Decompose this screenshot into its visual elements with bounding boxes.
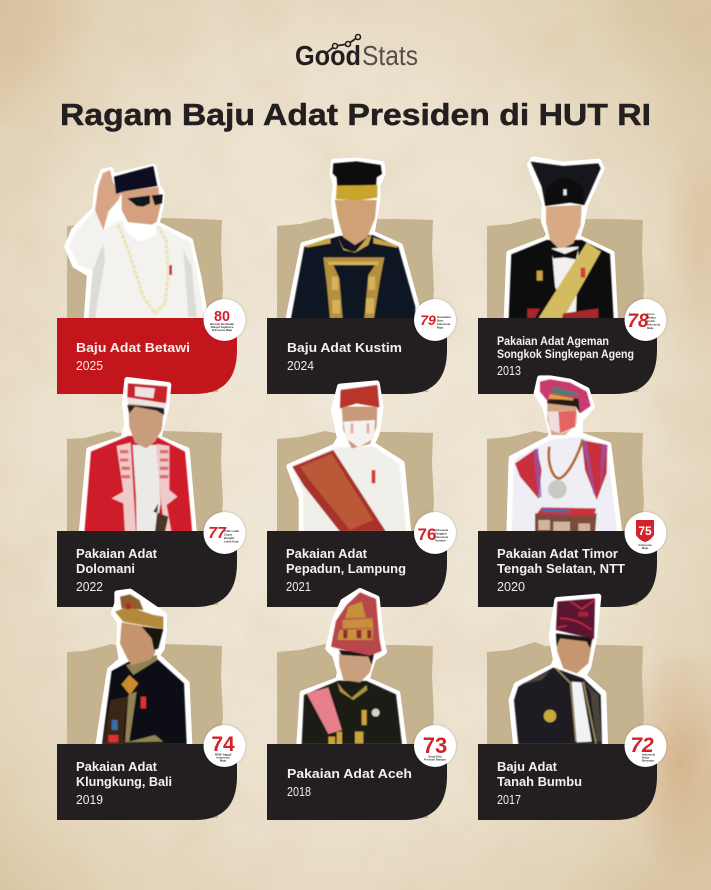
figure: Jokowi in Aceh dress	[299, 591, 404, 745]
badge: HUT 77: Lebih Kuat	[224, 540, 239, 544]
label text	[497, 759, 582, 789]
label text: Baju Adat Kustim	[287, 340, 402, 355]
card: Pakaian Adat Klungkung, Bali 2019	[57, 592, 246, 820]
badge: HUT 73: Prestasi Bangsa	[424, 758, 446, 762]
year: 2022	[76, 580, 103, 594]
badge: HUT 75: 75	[638, 524, 652, 538]
figure: Jokowi in Kustim dress	[288, 161, 417, 320]
figure: Jokowi in Klungkung dress	[98, 592, 189, 745]
figure: Jokowi in Dolomani dress	[82, 380, 194, 533]
badge: HUT 76: Indonesia	[435, 535, 448, 539]
label panel	[267, 318, 447, 394]
badge: HUT 74: SDM Unggul	[215, 752, 232, 756]
label text	[76, 546, 158, 576]
badge: HUT 80: 80	[214, 308, 230, 325]
figure: Jokowi in Tanah Bumbu dress	[512, 597, 605, 745]
badge: HUT 80: Indonesia Maju	[212, 328, 232, 332]
badge: HUT 78: Untuk	[647, 319, 655, 323]
label text: Tengah Selatan, NTT	[497, 561, 625, 576]
badge: HUT 78: 78	[627, 311, 649, 332]
label panel	[57, 531, 237, 607]
badge: HUT 79: Nusantara	[437, 315, 451, 319]
logo: GoodStats	[295, 34, 418, 71]
year: 2019	[76, 793, 103, 807]
badge: HUT 79: Maju	[437, 326, 444, 330]
year: 2025	[76, 359, 103, 373]
title: Ragam Baju Adat Presiden di HUT RI	[60, 97, 651, 132]
badge: HUT 73	[414, 725, 456, 767]
year: 2020	[497, 580, 525, 594]
label text: Pakaian Adat Timor	[497, 546, 618, 561]
badge: HUT 72: Kerja	[642, 756, 649, 760]
figure: Jokowi in Pepadun dress	[289, 383, 408, 533]
badge: HUT 79	[414, 299, 456, 341]
badge: HUT 76	[414, 512, 456, 554]
label text	[497, 334, 634, 361]
badge: HUT 77: 77	[208, 525, 227, 542]
badge: HUT 78	[624, 299, 666, 341]
badge: HUT 75	[624, 512, 666, 554]
label panel	[478, 531, 657, 607]
label text: Klungkung, Bali	[76, 774, 172, 789]
badge: HUT 79: 79	[420, 312, 436, 328]
card: Baju Adat Betawi 2025	[57, 166, 246, 394]
label text	[286, 546, 406, 576]
label text: Baju Adat	[497, 759, 558, 774]
label panel	[267, 531, 447, 607]
logo: GoodStats: Stats	[362, 40, 418, 71]
badge: HUT 79: Indonesia	[437, 322, 450, 326]
card: Pakaian Adat Aceh 2018	[267, 591, 456, 820]
label panel	[478, 318, 657, 394]
label text: Pakaian Adat Aceh	[287, 766, 412, 781]
badge: HUT 74: Maju	[220, 758, 226, 762]
badge: HUT 72	[624, 725, 666, 767]
logo: GoodStats: Good	[295, 40, 361, 71]
badge: HUT 78: Indonesia	[647, 322, 660, 326]
label panel	[57, 744, 237, 820]
label panel	[57, 318, 237, 394]
label text	[76, 759, 172, 789]
label text: Pakaian Adat	[286, 546, 368, 561]
badge: HUT 75: Indonesia	[638, 543, 652, 547]
badge: HUT 78: Maju	[647, 326, 654, 330]
badge: HUT 72: Indonesia	[642, 752, 655, 756]
figure: Jokowi in Ageman Songkok Singkepan Ageng	[507, 159, 615, 320]
label text: Pakaian Adat Ageman	[497, 334, 609, 348]
label panel	[478, 744, 657, 820]
badge: HUT 78: Melaju	[647, 316, 656, 320]
badge: HUT 74: 74	[211, 733, 235, 756]
year: 2018	[287, 785, 311, 799]
year: 2017	[497, 793, 521, 807]
card: Pakaian Adat Timor Tengah Selatan, NTT 2020	[478, 378, 666, 607]
badge: HUT 77: Pulih Lebih	[224, 529, 239, 533]
badge: HUT 77: Cepat	[224, 532, 232, 536]
badge: HUT 73: Kerja Kita	[428, 754, 442, 758]
card: Pakaian Adat Pepadun, Lampung 2021	[267, 383, 456, 607]
label text: Tanah Bumbu	[497, 774, 582, 789]
badge: HUT 78: Terus	[647, 312, 655, 316]
year: 2024	[287, 359, 314, 373]
badge: HUT 74	[204, 725, 246, 767]
badge: HUT 75: Maju	[642, 546, 648, 550]
badge: HUT 76: Indonesia	[435, 528, 448, 532]
badge: HUT 79: Baru	[437, 318, 444, 322]
label text	[497, 546, 625, 576]
badge: HUT 73: 73	[423, 733, 447, 758]
label panel	[267, 744, 447, 820]
year: 2013	[497, 364, 521, 378]
card: Baju Adat Tanah Bumbu 2017	[478, 597, 666, 820]
badge: HUT 76: Tangguh	[435, 532, 447, 536]
badge: HUT 76: Tumbuh	[435, 538, 446, 542]
badge: HUT 72: Bersama	[642, 758, 654, 762]
badge: HUT 77	[204, 512, 246, 554]
label text: Pakaian Adat	[76, 546, 158, 561]
card: Baju Adat Kustim 2024	[267, 161, 456, 394]
label text: Pepadun, Lampung	[286, 561, 406, 576]
label text: Dolomani	[76, 561, 135, 576]
label text: Pakaian Adat	[76, 759, 158, 774]
label text: Songkok Singkepan Ageng	[497, 347, 634, 361]
card: Pakaian Adat Ageman Songkok Singkepan Ageng 2013	[478, 159, 666, 394]
figure: Jokowi in Timor dress	[509, 378, 619, 533]
badge: HUT 72: 72	[630, 734, 654, 757]
badge: HUT 74: Indonesia	[216, 756, 230, 760]
badge: HUT 80: Bersatu Berdaulat	[210, 322, 234, 326]
badge: HUT 76: 76	[418, 525, 436, 544]
year: 2021	[286, 580, 311, 594]
figure: Prabowo in white Betawi dress	[67, 166, 206, 320]
badge: HUT 80	[204, 299, 246, 341]
label text: Baju Adat Betawi	[76, 340, 190, 355]
badge: HUT 77: Bangkit	[224, 536, 234, 540]
card: Pakaian Adat Dolomani 2022	[57, 380, 246, 607]
badge: HUT 80: Rakyat Sejahtera	[211, 325, 234, 329]
